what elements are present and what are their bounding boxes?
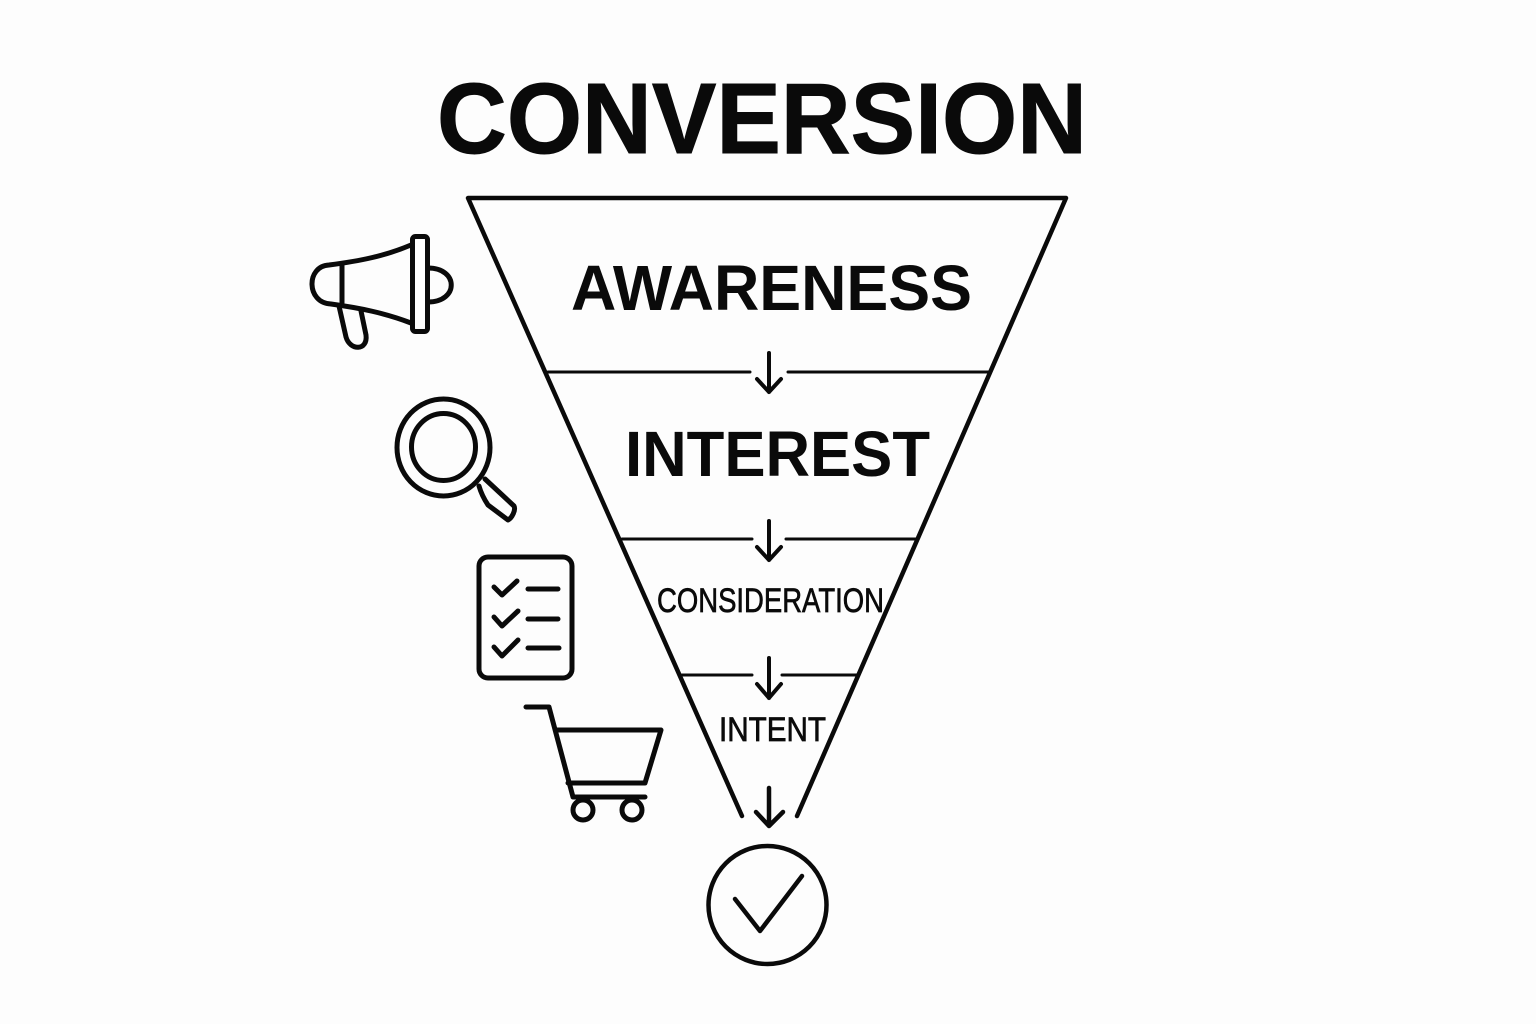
icon: conversion check circle <box>708 846 826 964</box>
stage: interest <box>622 418 930 560</box>
stage: consideration: CONSIDERATION <box>657 582 884 620</box>
stage: intent: INTENT <box>719 711 826 749</box>
stage: interest: INTEREST <box>625 418 930 490</box>
icon: checklist <box>479 557 572 678</box>
icon: magnifying glass <box>397 399 515 520</box>
icon: megaphone <box>312 236 451 347</box>
icon: shopping cart <box>526 707 661 820</box>
stage: awareness: AWARENESS <box>571 252 972 324</box>
title: CONVERSION <box>437 63 1087 175</box>
stage: intent <box>719 711 826 826</box>
stage: awareness <box>548 252 990 392</box>
funnel <box>468 198 1066 826</box>
funnel outline <box>468 198 1066 816</box>
stage: consideration <box>657 582 884 698</box>
